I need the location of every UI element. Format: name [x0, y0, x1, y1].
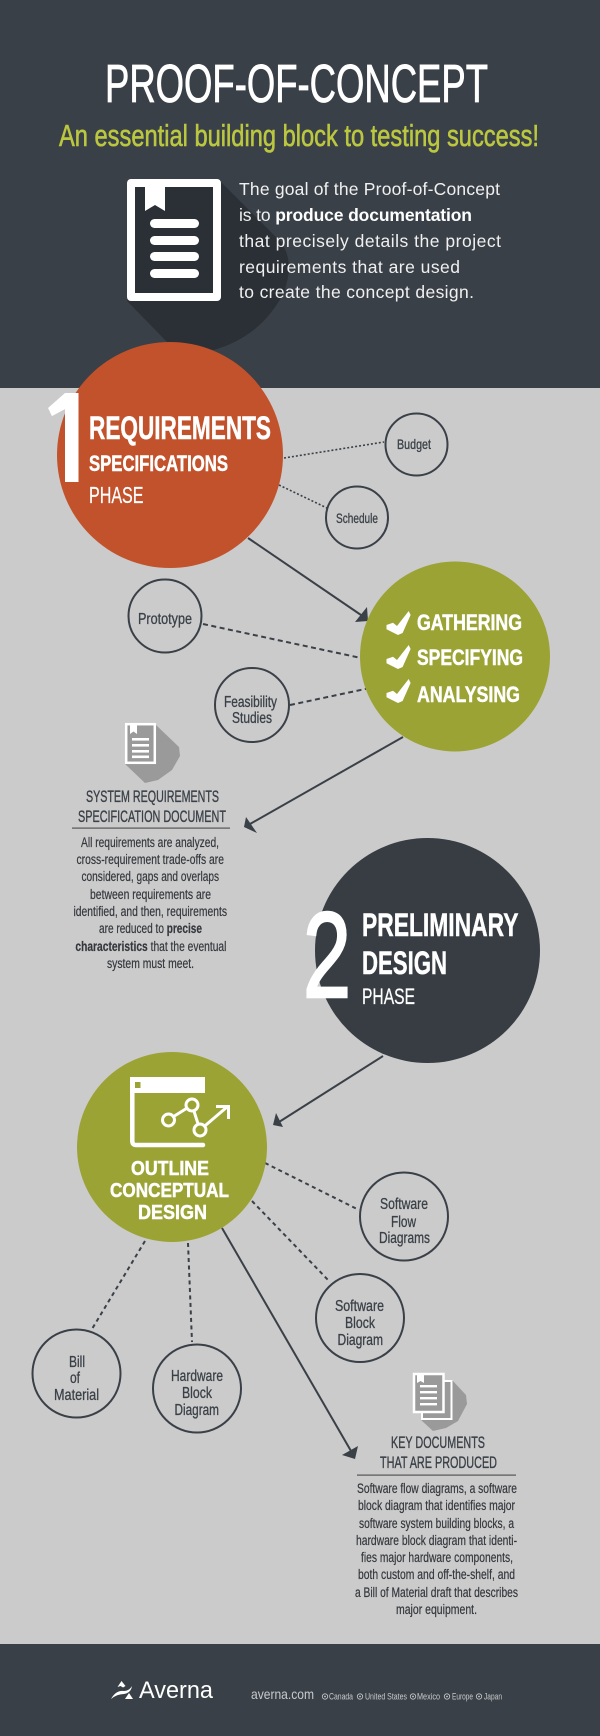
label: specifying: SPECIFYING — [417, 645, 523, 670]
heading: key documents: KEY DOCUMENTS — [391, 1434, 485, 1452]
node: feasibility studies: Studies — [232, 710, 272, 727]
office locations: Europe — [452, 1692, 473, 1702]
text block: requirements description: identified, and then, requirements — [74, 904, 227, 919]
node: bill of material: Material — [54, 1387, 99, 1404]
intro text: requirements that are used — [239, 257, 460, 277]
connector: hardware block — [188, 1243, 192, 1342]
arrow: outline to key documents — [222, 1228, 358, 1459]
text block: requirements description: All requirements are analyzed, — [81, 835, 219, 850]
website: averna.com — [251, 1686, 314, 1702]
icon: stacked documents — [414, 1374, 467, 1431]
office locations — [322, 1692, 502, 1702]
text block: key documents description: major equipment. — [396, 1602, 477, 1617]
text block: key documents description: both custom and off-the-shelf, and — [358, 1567, 515, 1582]
phase 2 heading: DESIGN — [362, 945, 447, 981]
office locations: Canada — [329, 1692, 353, 1702]
outline heading — [110, 1158, 229, 1224]
office locations: Japan — [484, 1692, 502, 1702]
connector: phase 1 to schedule — [279, 485, 327, 508]
panel: outline conceptual design — [77, 1052, 267, 1242]
intro text: The goal of the Proof-of-Concept — [239, 179, 500, 199]
number 1: 1 — [42, 364, 92, 532]
node: budget: Budget — [397, 436, 431, 452]
label: analysing: ANALYSING — [417, 682, 520, 707]
node: software block diagram: Diagram — [338, 1332, 383, 1349]
phase 1 heading: REQUIREMENTS — [89, 410, 271, 446]
panel: phase 2 circle — [303, 838, 540, 1063]
node: schedule — [326, 486, 388, 548]
heading: system requirements specification document: SYSTEM REQUIREMENTS — [86, 788, 219, 806]
connector: prototype — [203, 624, 361, 658]
panel: phase 1 circle — [42, 342, 283, 568]
label: gathering: GATHERING — [417, 610, 522, 635]
icon: check — [386, 611, 411, 635]
arrow: phase 2 to outline — [273, 1056, 383, 1127]
outline heading: CONCEPTUAL — [110, 1180, 229, 1202]
node: hardware block diagram: Diagram — [174, 1402, 219, 1419]
heading: system requirements specification document — [78, 788, 226, 826]
heading: key documents — [380, 1434, 497, 1472]
node: feasibility studies — [215, 668, 289, 742]
text block: requirements description — [74, 835, 227, 971]
node: budget — [386, 414, 448, 476]
connector: bill of material — [92, 1241, 145, 1329]
node: software flow diagrams: Software — [380, 1196, 428, 1213]
phase 2 heading — [362, 907, 518, 1009]
icon: check — [386, 679, 411, 703]
node: bill of material: Bill — [69, 1354, 85, 1371]
intro text — [239, 179, 501, 302]
node: software flow diagrams: Flow — [391, 1214, 416, 1231]
footer band — [0, 1644, 600, 1736]
intro text: that precisely details the project — [239, 231, 501, 251]
icon: check — [386, 645, 411, 669]
office locations: Mexico — [417, 1692, 440, 1702]
outline heading: DESIGN — [138, 1202, 207, 1224]
logo: Averna: Averna — [139, 1677, 214, 1704]
node: software block diagram: Block — [345, 1315, 376, 1332]
node: hardware block diagram: Block — [182, 1385, 213, 1402]
text block: key documents description: fies major hardware components, — [361, 1550, 513, 1565]
intro text: is to produce documentation — [239, 205, 472, 225]
node: software flow diagrams: Diagrams — [379, 1230, 430, 1247]
node: hardware block diagram — [153, 1344, 241, 1432]
node: feasibility studies: Feasibility — [224, 694, 277, 711]
text block: requirements description: are reduced to precise — [99, 921, 202, 936]
phase 1 heading: PHASE — [89, 482, 144, 508]
connector: software flow — [265, 1163, 359, 1210]
number 1 — [48, 393, 78, 482]
node: bill of material: of — [70, 1370, 80, 1387]
header band — [0, 0, 600, 388]
text block: key documents description: software system building blocks, a — [359, 1516, 514, 1531]
connector: feasibility — [290, 688, 370, 705]
icon: window with chart — [130, 1077, 228, 1145]
node: software block diagram — [316, 1274, 404, 1362]
intro text: to create the concept design. — [239, 282, 474, 302]
node: prototype: Prototype — [138, 611, 192, 628]
node: prototype — [128, 580, 202, 652]
node: schedule: Schedule — [336, 510, 378, 526]
arrow: phase 1 to gathering — [248, 538, 368, 622]
icon: small document — [125, 724, 180, 783]
phase 2 heading: PHASE — [362, 984, 415, 1009]
connector: phase 1 to budget — [284, 442, 384, 458]
text block: requirements description: considered, gaps and overlaps — [82, 869, 219, 884]
node: software block diagram: Software — [335, 1298, 384, 1315]
phase 1 heading: SPECIFICATIONS — [89, 451, 228, 476]
text block: key documents description: block diagram that identifies major — [358, 1498, 515, 1513]
text block: requirements description: characteristics that the eventual — [75, 939, 226, 954]
text block: key documents description: a Bill of Material draft that describes — [355, 1585, 518, 1600]
text block: requirements description: system must meet. — [107, 956, 194, 971]
number 2: 2 — [303, 887, 351, 1023]
heading: key documents: THAT ARE PRODUCED — [380, 1454, 497, 1472]
outline heading: OUTLINE — [131, 1158, 209, 1180]
text block: requirements description: between requirements are — [90, 887, 211, 902]
office locations: United States — [365, 1692, 407, 1702]
icon: document with long shadow — [127, 182, 289, 350]
connector: software block — [252, 1201, 330, 1282]
arrow: analysing to document — [244, 737, 403, 833]
node: hardware block diagram: Hardware — [171, 1368, 223, 1385]
heading: system requirements specification document: SPECIFICATION DOCUMENT — [78, 808, 226, 826]
text block: key documents description — [355, 1481, 518, 1617]
phase 1 heading — [89, 410, 271, 508]
text block: requirements description: cross-requirement trade-offs are — [76, 852, 224, 867]
node: bill of material — [32, 1330, 120, 1418]
text block: key documents description: Software flow diagrams, a software — [357, 1481, 517, 1496]
text block: key documents description: hardware block diagram that identi- — [356, 1533, 517, 1548]
phase 2 heading: PRELIMINARY — [362, 907, 518, 943]
node: software flow diagrams — [360, 1172, 448, 1260]
panel: gathering specifying analysing — [360, 562, 550, 752]
